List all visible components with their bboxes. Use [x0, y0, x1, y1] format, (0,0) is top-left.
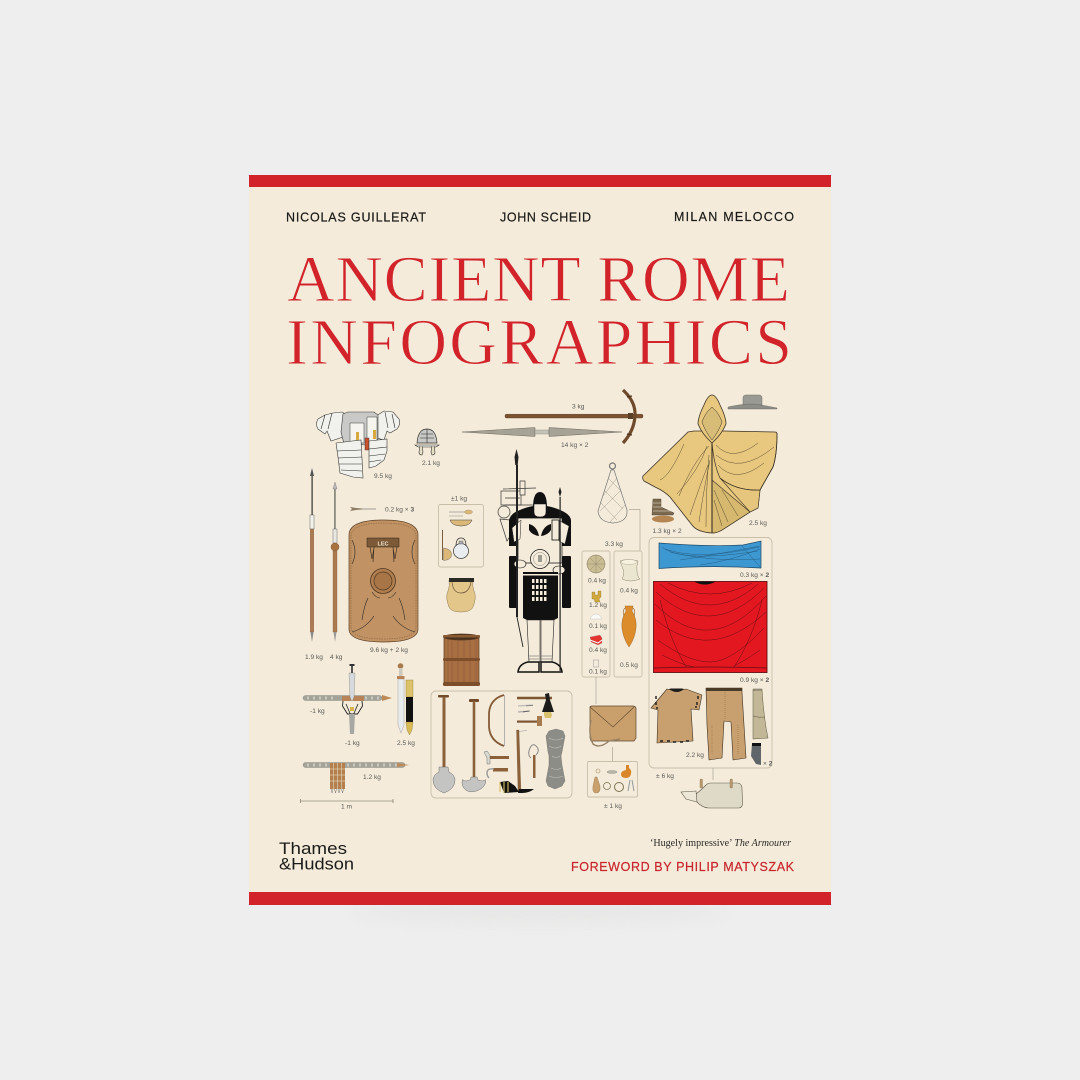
icon: scabbard [406, 680, 413, 735]
legs [527, 620, 554, 662]
panel: rations left: 1.2 kg [589, 602, 607, 609]
authors: MILAN MELOCCO [674, 210, 794, 224]
icon: small blades [518, 705, 533, 712]
pilum right [558, 487, 562, 671]
icon: hammer [484, 751, 509, 764]
icon: pick [462, 699, 486, 792]
armour: lorica segmentata [316, 411, 400, 478]
icon: clay pot [447, 578, 475, 612]
panel: personal items [588, 762, 638, 797]
icon: spike tool [516, 730, 527, 792]
top red band [249, 175, 831, 187]
connector: rations to satchel [595, 677, 597, 704]
icon: helmet [415, 429, 439, 455]
label: apron belt weight: 1.2 kg [363, 774, 381, 781]
icon: sandal [652, 499, 674, 522]
connector: clothing to sack [712, 768, 714, 780]
foreword credit: FOREWORD BY PHILIP MATYSZAK [571, 860, 795, 874]
label: net weight: 3.3 kg [605, 541, 623, 548]
icon: javelin one [310, 468, 314, 642]
quote: ‘Hugely impressive’ The Armourer [650, 837, 792, 849]
panel: rations left: 0.4 kg [588, 578, 606, 584]
icon: shield: LEC [378, 542, 389, 548]
title: ANCIENT ROME [287, 243, 790, 316]
scale bar: one metre [300, 799, 393, 810]
icon: stake / crossbar [505, 390, 643, 443]
panel: rations left: 0.1 kg [589, 668, 607, 676]
panel: rations right: 0.5 kg [620, 662, 638, 669]
icon: net bag [598, 463, 627, 523]
icon: hook tool [487, 768, 508, 778]
scale bar: one metre: 1 m [341, 804, 352, 810]
logo: Thames & Hudson: &Hudson [279, 854, 354, 874]
icon: shield [349, 520, 418, 642]
labels: javelin weights [305, 654, 343, 661]
panel: clothing [649, 538, 773, 768]
icon: sack [681, 779, 742, 808]
icon: double spear [462, 428, 622, 436]
icon: tunic [651, 688, 702, 743]
arms [509, 556, 518, 608]
label: belt weight: -1 kg [310, 708, 325, 715]
label: personal items weight: ± 1 kg [604, 803, 622, 810]
label: clothing weight: ± 6 kg [656, 773, 674, 780]
panel: mess kit [438, 504, 484, 567]
logo: Thames & Hudson [279, 839, 354, 874]
authors: JOHN SCHEID [500, 210, 591, 224]
spear long [514, 449, 518, 617]
connector: net to rations [629, 510, 640, 550]
head [533, 492, 547, 518]
label: dagger weight: -1 kg [345, 740, 360, 747]
panel: rations left: 0.1 kg [589, 623, 607, 630]
label: sock count: × 2 [763, 760, 773, 768]
feet [518, 662, 562, 672]
icon: sickle [529, 745, 538, 778]
shoulders and torso [509, 506, 571, 546]
icon: apron belt [303, 762, 409, 793]
panel: rations right [614, 551, 642, 677]
panel: rations left: 0.4 kg [589, 647, 607, 654]
panel: rations left [582, 551, 610, 677]
icon: hat [728, 395, 777, 409]
icon: blue scarf [659, 541, 761, 568]
logo: Thames & Hudson: Thames [279, 839, 347, 858]
label: sword weight: 2.5 kg [397, 740, 415, 747]
icon: shovel [433, 695, 455, 793]
skirt [523, 572, 558, 620]
authors: NICOLAS GUILLERAT [286, 210, 426, 224]
label: spear weight: 14 kg × 2 [561, 442, 589, 449]
label: helmet weight: 2.1 kg [422, 460, 440, 467]
panel: tools [431, 691, 572, 798]
icon: belt with dagger [303, 664, 392, 734]
authors [286, 210, 794, 224]
bottom red band [249, 892, 831, 905]
round phalerae [530, 550, 550, 568]
label: dart weight: 0.2 kg × 3 [385, 506, 414, 514]
label: mess kit weight: ±1 kg [451, 496, 467, 502]
label: sandal weight: 1.3 kg × 2 [652, 528, 682, 535]
icon: mallet [517, 716, 542, 726]
icon: chain mail [546, 729, 565, 789]
icon: turf cutter [500, 781, 534, 793]
panel: rations right: 0.4 kg [620, 588, 638, 594]
icon: sword [397, 663, 404, 733]
label: cloak weight: 2.5 kg [749, 520, 767, 527]
icon: axe [517, 693, 554, 718]
labels: javelin weights: 1.9 kg [305, 654, 323, 661]
icon: satchel [590, 706, 636, 746]
icon: cloak [643, 395, 777, 533]
icon: sock [751, 743, 761, 765]
icon: saw [489, 695, 504, 746]
icon: red cloak [654, 582, 767, 672]
figure: roman soldier [498, 449, 571, 672]
icon: rolled cloth [753, 689, 768, 739]
icon: dart [350, 507, 376, 511]
label: shield weight: 9.6 kg + 2 kg [370, 647, 408, 654]
book cover [249, 175, 831, 905]
title: INFOGRAPHICS [286, 306, 792, 379]
label: armour weight: 9.5 kg [374, 473, 392, 480]
icon: trousers [706, 688, 746, 760]
title [286, 243, 792, 379]
label: tunic weight: 2.2 kg [686, 752, 704, 759]
label: scarf weight: 0.3 kg × 2 [740, 572, 769, 579]
label: stake weight: 3 kg [572, 404, 585, 410]
label: red cloak weight: 0.9 kg × 2 [740, 677, 769, 684]
connector: tools kit to satchel [612, 747, 614, 761]
labels: javelin weights: 4 kg [330, 654, 343, 661]
icon: javelin two [331, 482, 339, 642]
backpack [498, 481, 536, 541]
icon: wicker basket [443, 634, 480, 686]
